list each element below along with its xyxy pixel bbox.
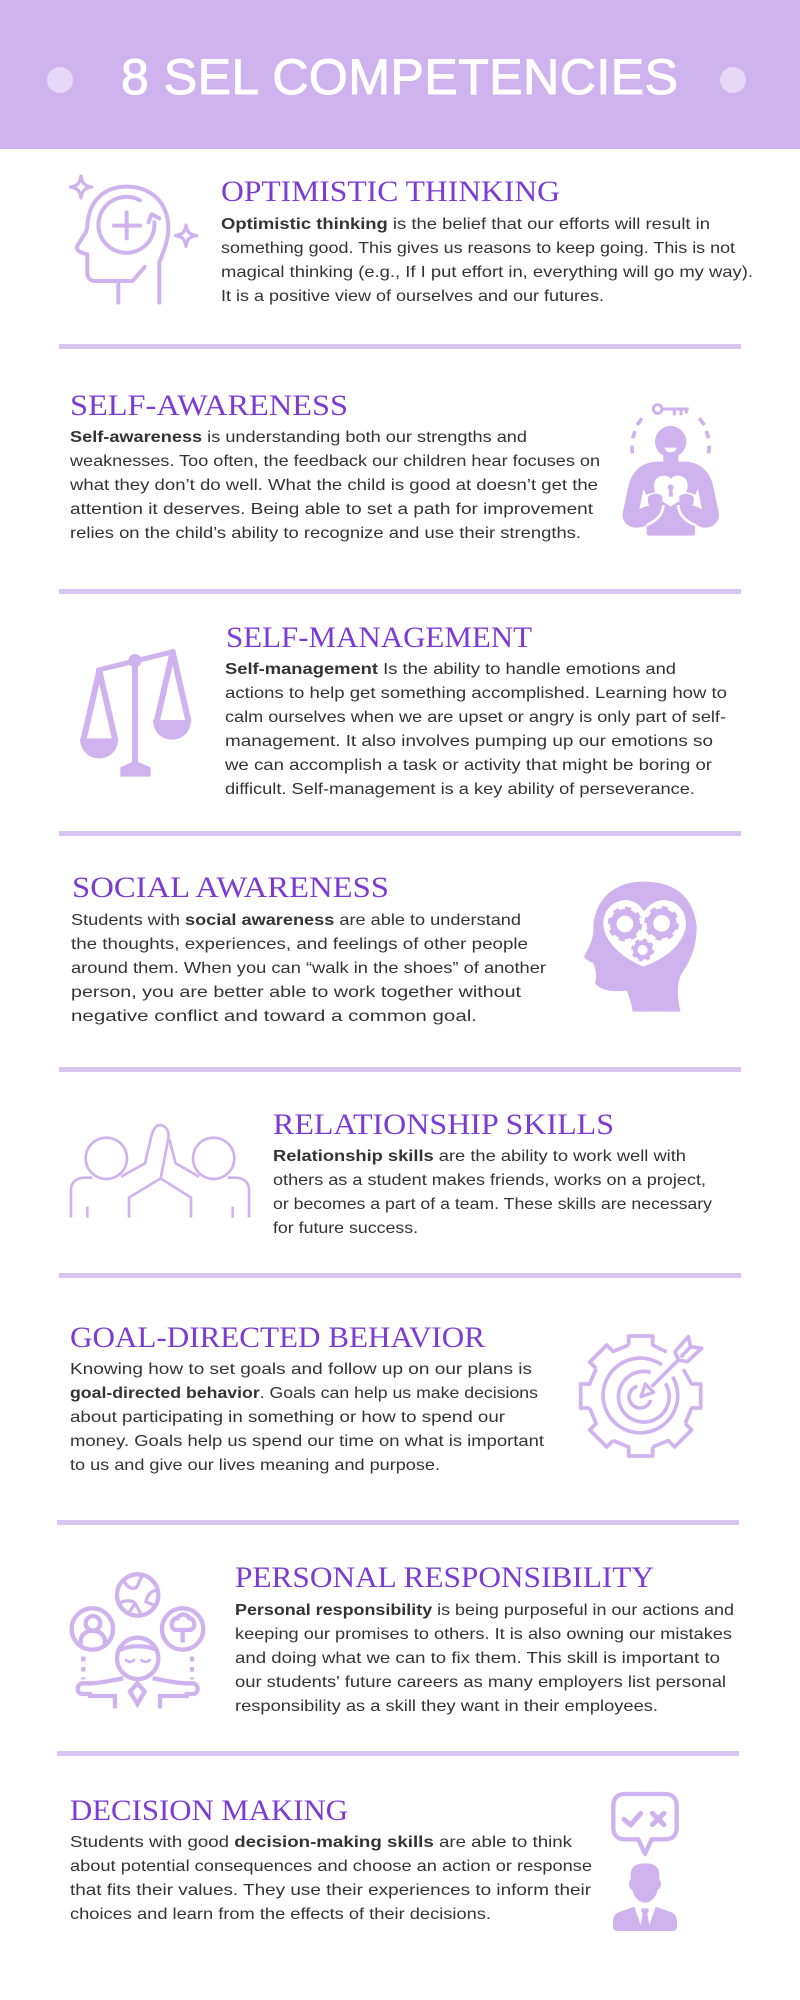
text block: Relationship skills are the ability to work well with [273, 1148, 686, 1165]
text block: It is a positive view of ourselves and our futures. [221, 288, 604, 305]
text block: or becomes a part of a team. These skills are necessary [273, 1196, 712, 1213]
heading: PERSONAL RESPONSIBILITY [235, 1561, 654, 1594]
text block: Knowing how to set goals and follow up on our plans is [70, 1361, 532, 1378]
text block: difficult. Self-management is a key ability of perseverance. [225, 781, 695, 798]
text block: responsibility as a skill they want in their employees. [235, 1698, 658, 1715]
icon: balance scale [80, 652, 191, 777]
text block: choices and learn from the effects of their decisions. [70, 1906, 491, 1923]
text block [70, 1361, 545, 1474]
heading: DECISION MAKING [70, 1794, 348, 1827]
icon: target gear with arrow [579, 1334, 702, 1458]
text block [221, 216, 753, 305]
heading: SELF-MANAGEMENT [226, 621, 532, 654]
text block [224, 661, 727, 798]
title: 8 SEL COMPETENCIES [121, 49, 678, 105]
left header dot [47, 67, 73, 93]
text block: weaknesses. Too often, the feedback our children hear focuses on [69, 453, 600, 470]
icon: head with plus [70, 176, 197, 303]
panel: optimistic thinking [70, 175, 753, 305]
heading: SELF-AWARENESS [70, 389, 348, 422]
text block: management. It also involves pumping up our emotions so [225, 733, 713, 750]
text block: relies on the child’s ability to recognize and use their strengths. [70, 525, 581, 542]
heading: GOAL-DIRECTED BEHAVIOR [70, 1321, 485, 1354]
panel: relationship skills [71, 1108, 712, 1237]
text block: that fits their values. They use their experiences to inform their [70, 1882, 592, 1899]
text block: our students' future careers as many employers list personal [235, 1674, 726, 1691]
text block: actions to help get something accomplished. Learning how to [225, 685, 727, 702]
icon: head with heart and gears [584, 882, 697, 1012]
text block: and doing what we can to fix them. This skill is important to [235, 1650, 720, 1667]
text block [235, 1602, 734, 1715]
text block: others as a student makes friends, works on a project, [273, 1172, 706, 1189]
text block: the thoughts, experiences, and feelings of other people [71, 936, 528, 953]
text block: Optimistic thinking is the belief that our efforts will result in [221, 216, 710, 233]
text block: to us and give our lives meaning and purpose. [70, 1457, 440, 1474]
text block [273, 1148, 712, 1237]
text block [69, 429, 600, 542]
heading: SOCIAL AWARENESS [72, 871, 389, 904]
text block: magical thinking (e.g., If I put effort in, everything will go my way). [221, 264, 753, 281]
text block: about potential consequences and choose an action or response [70, 1858, 592, 1875]
panel: decision making [70, 1794, 677, 1931]
text block: keeping our promises to others. It is also owning our mistakes [235, 1626, 732, 1643]
text block: something good. This gives us reasons to keep going. This is not [221, 240, 736, 257]
text block: Self-management Is the ability to handle emotions and [225, 661, 676, 678]
text block [71, 912, 547, 1025]
panel: self-management [80, 621, 727, 798]
text block: Self-awareness is understanding both our strengths and [70, 429, 527, 446]
icon: speech bubble and businessman [613, 1794, 677, 1931]
text block: around them. When you can “walk in the shoes” of another [71, 960, 547, 977]
text block: for future success. [273, 1220, 418, 1237]
icon: person with three circles [72, 1574, 203, 1708]
icon: two people high five [71, 1125, 249, 1218]
header banner [0, 0, 800, 149]
text block: we can accomplish a task or activity that might be boring or [224, 757, 713, 774]
icon: person with key and heart [623, 405, 719, 536]
panel: goal-directed behavior [70, 1321, 702, 1474]
text block: calm ourselves when we are upset or angry is only part of self- [225, 709, 726, 726]
panel: personal responsibility [72, 1561, 734, 1715]
text block: person, you are better able to work together without [71, 984, 522, 1001]
text block: attention it deserves. Being able to set a path for improvement [70, 501, 594, 518]
text block: what they don’t do well. What the child is good at doesn’t get the [69, 477, 598, 494]
text block [70, 1834, 592, 1923]
heading: RELATIONSHIP SKILLS [273, 1108, 614, 1141]
text block: Students with social awareness are able to understand [71, 912, 521, 929]
heading: OPTIMISTIC THINKING [221, 175, 560, 208]
text block: money. Goals help us spend our time on what is important [70, 1433, 545, 1450]
text block: Students with good decision-making skills are able to think [70, 1834, 573, 1851]
text block: about participating in something or how to spend our [70, 1409, 506, 1426]
panel: self-awareness [69, 389, 719, 542]
right header dot [720, 67, 746, 93]
text block: goal-directed behavior . Goals can help us make decisions [70, 1385, 538, 1402]
text block: Personal responsibility is being purposeful in our actions and [235, 1602, 734, 1619]
panel: social awareness [71, 871, 697, 1025]
text block: negative conflict and toward a common goal. [71, 1008, 477, 1025]
